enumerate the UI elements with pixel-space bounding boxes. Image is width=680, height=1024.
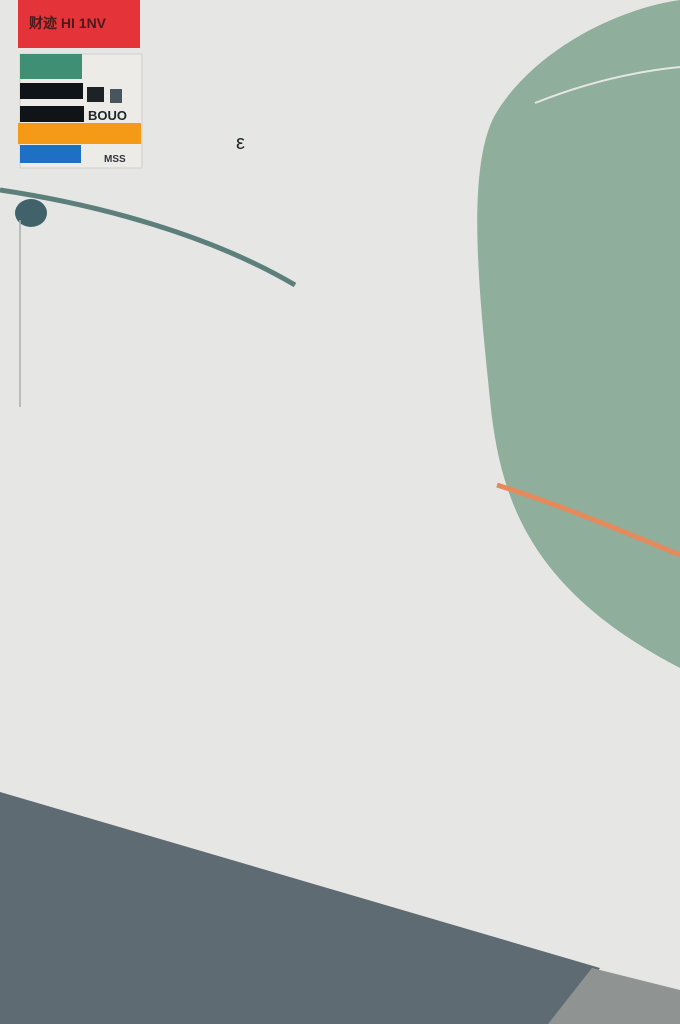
white arc on green shape (535, 67, 680, 103)
orange accent stroke (497, 485, 680, 555)
black bar (20, 83, 83, 99)
vertical guide line (19, 220, 21, 407)
floor (0, 792, 600, 1024)
blue bar (20, 145, 81, 163)
green swatch (20, 54, 82, 79)
label: MSS: MSS (104, 154, 126, 165)
green background shape (477, 0, 680, 668)
label: BOUO: BOUO (88, 108, 127, 123)
squiggle mark: ε (236, 132, 245, 154)
title block (18, 0, 140, 48)
title block: 财迹 HI 1NV (28, 15, 107, 31)
swatch panel (18, 54, 142, 168)
second black bar (20, 106, 84, 122)
teal curve with dot (0, 190, 295, 285)
floor lower band (548, 968, 680, 1024)
orange bar (18, 123, 141, 144)
small dark swatches (87, 87, 122, 103)
